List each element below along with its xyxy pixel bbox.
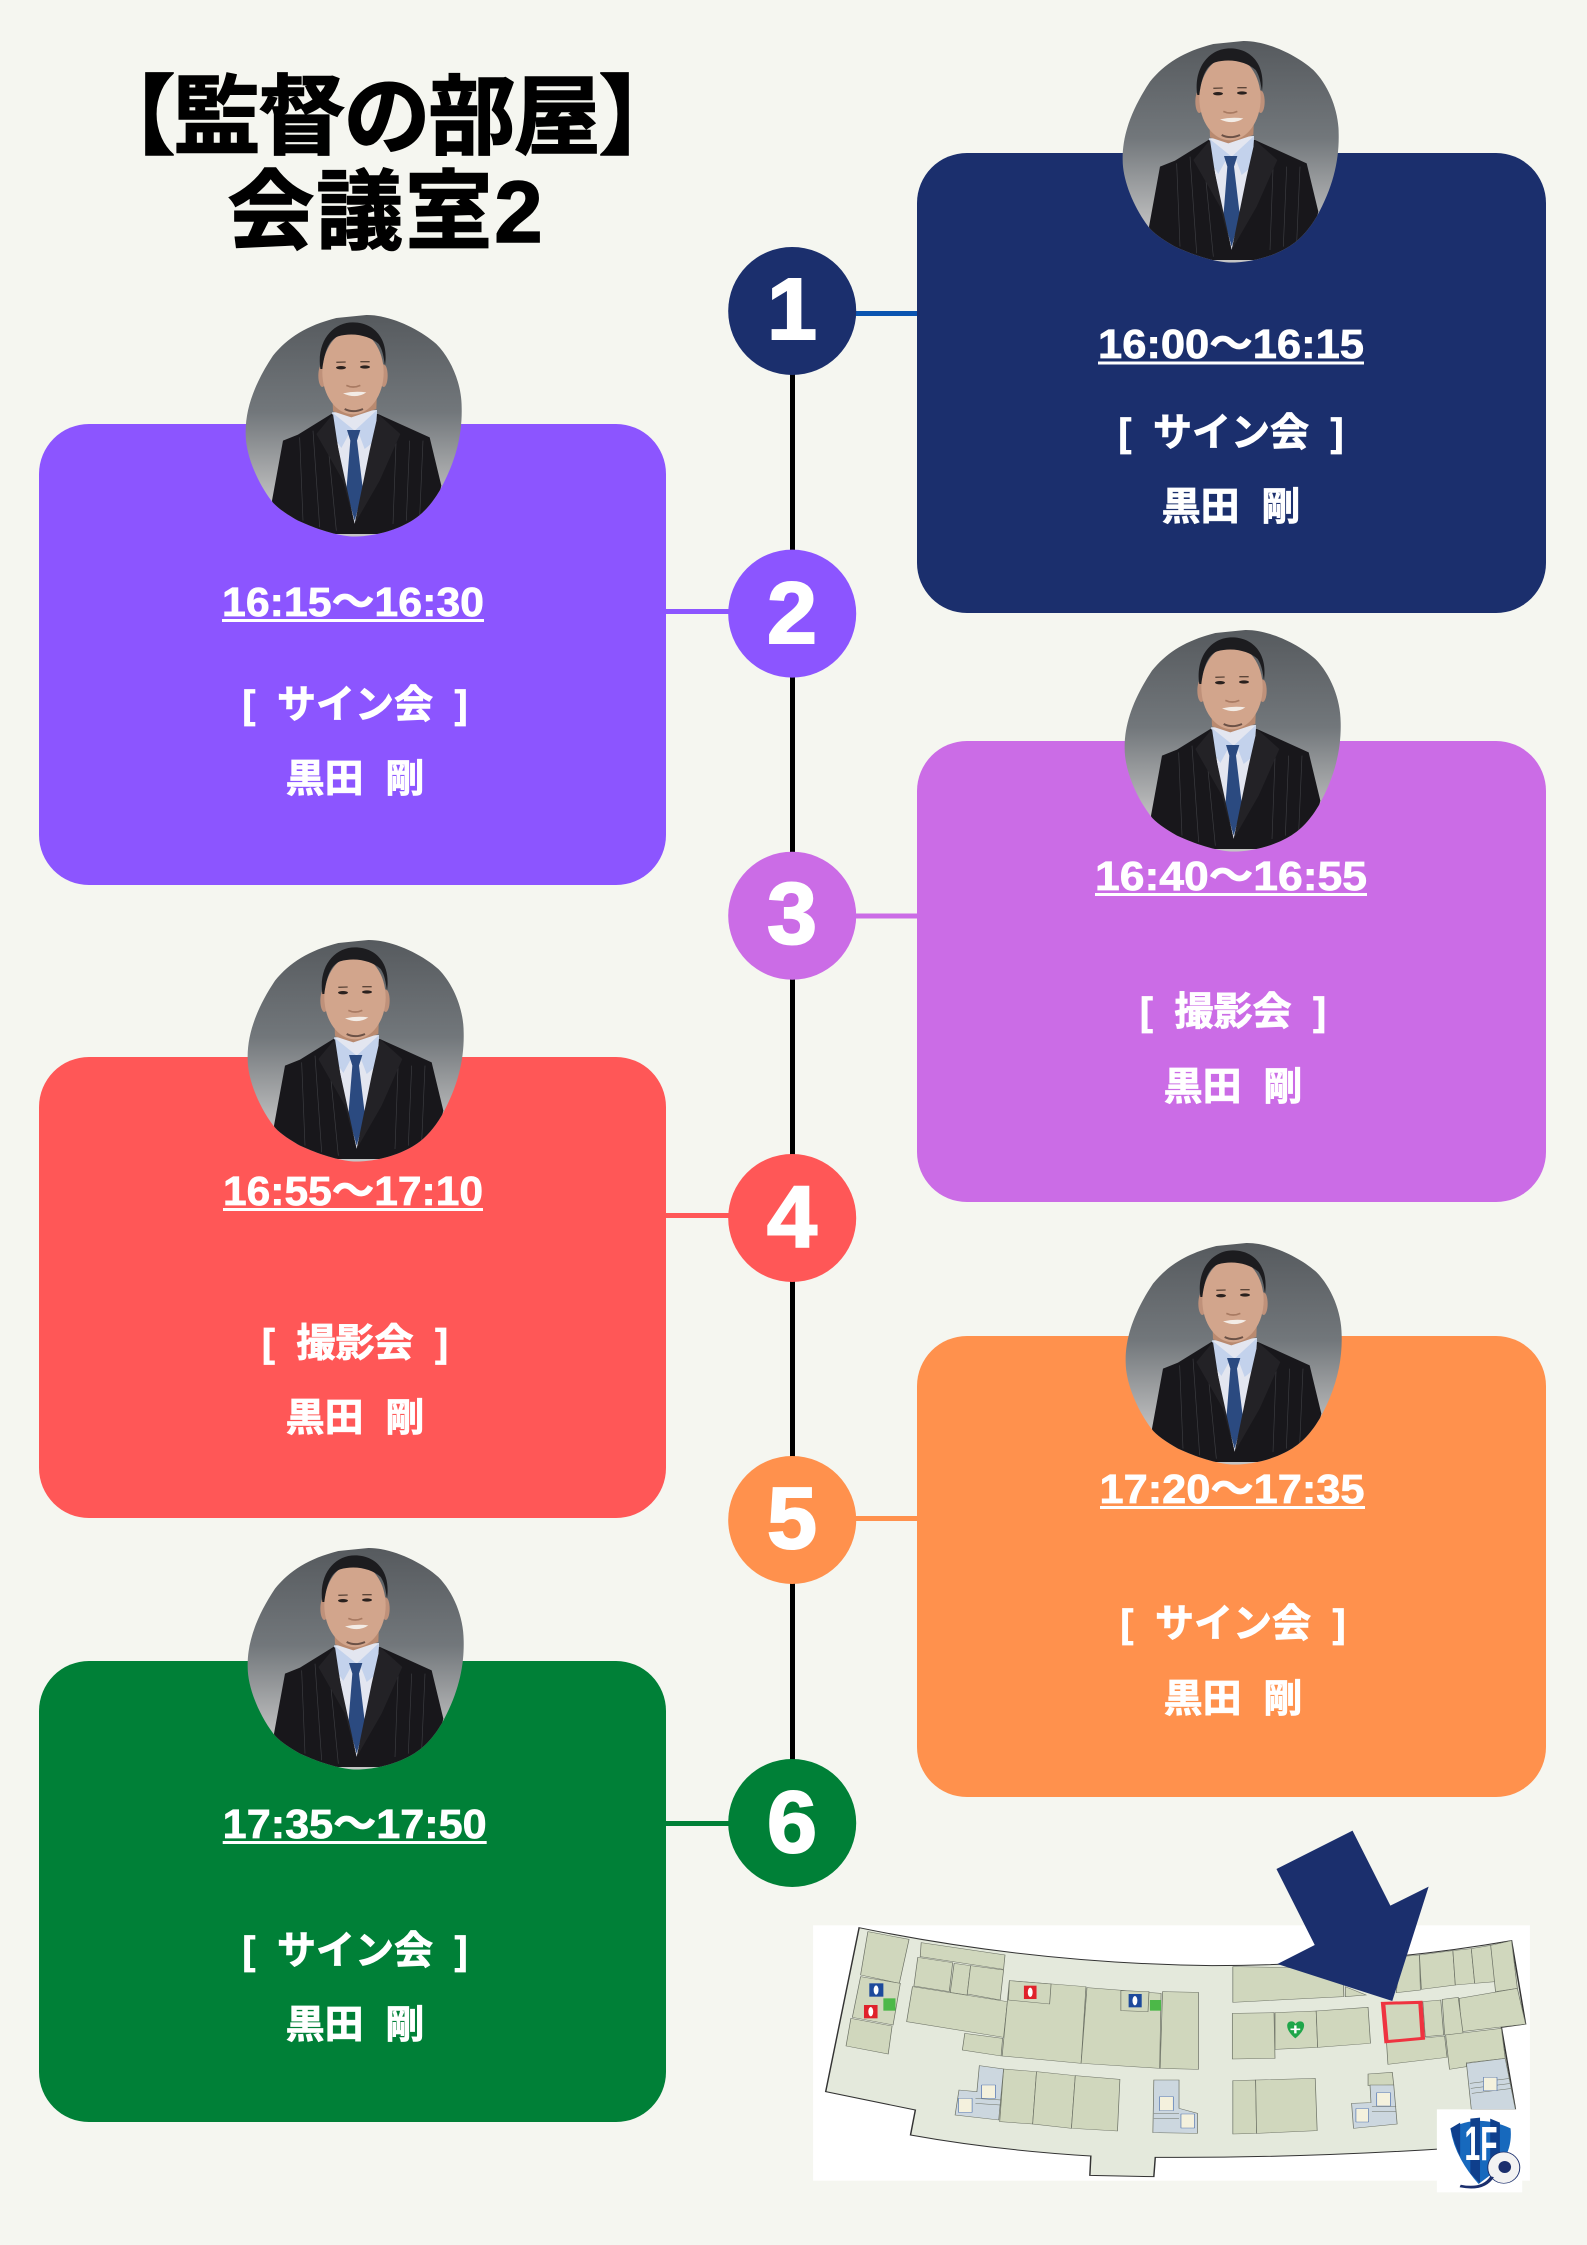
speaker 3: 黒田 剛	[1164, 1066, 1302, 1109]
panel: session 2	[39, 307, 666, 885]
event 3: [ 撮影会 ]	[1140, 991, 1326, 1034]
step marker 4: 4	[767, 1168, 817, 1266]
connector 5	[856, 1516, 918, 1521]
step marker 1: 1	[767, 261, 817, 358]
step marker 3: 3	[767, 866, 817, 962]
time 1: 16:00〜16:15	[1098, 321, 1364, 367]
photo: session 4	[238, 932, 472, 1166]
connector 6	[665, 1821, 729, 1826]
panel: session 5	[917, 1235, 1546, 1797]
time 4: 16:55〜17:10	[223, 1168, 483, 1214]
speaker 2: 黒田 剛	[286, 758, 424, 801]
panel: session 3	[917, 622, 1546, 1202]
photo: session 6	[238, 1540, 472, 1774]
step marker 5	[728, 1456, 856, 1584]
title: 【監督の部屋】	[88, 69, 684, 166]
connector 4	[665, 1213, 729, 1218]
icon: AED heart	[1287, 2021, 1304, 2038]
step marker 4	[728, 1154, 856, 1282]
step marker 3	[728, 852, 856, 980]
event 5: [ サイン会 ]	[1120, 1603, 1346, 1646]
speaker 6: 黒田 剛	[286, 2004, 424, 2047]
floor plan	[826, 1928, 1526, 2177]
event 6: [ サイン会 ]	[242, 1930, 468, 1973]
map icons	[864, 1983, 1497, 2128]
floor map with arrow and logo	[813, 1830, 1530, 2192]
event 1: [ サイン会 ]	[1118, 412, 1344, 455]
connector 3	[856, 914, 918, 918]
photo: session 3	[1115, 622, 1349, 856]
connector 1	[856, 311, 918, 316]
panel: session 1	[917, 33, 1546, 613]
logo	[1437, 2109, 1522, 2192]
speaker 1: 黒田 剛	[1162, 486, 1300, 529]
time 3: 16:40〜16:55	[1095, 853, 1367, 899]
title	[88, 69, 684, 261]
event 4: [ 撮影会 ]	[262, 1322, 448, 1366]
event 2: [ サイン会 ]	[242, 684, 468, 727]
time 5: 17:20〜17:35	[1100, 1466, 1364, 1512]
title: 会議室2	[227, 164, 545, 261]
step marker 6	[728, 1759, 856, 1887]
photo: session 5	[1116, 1235, 1350, 1469]
panel: session 4	[39, 932, 666, 1518]
step marker 2: 2	[767, 565, 817, 662]
time 2: 16:15〜16:30	[222, 579, 484, 625]
photo: session 2	[236, 307, 470, 541]
speaker 5: 黒田 剛	[1164, 1678, 1302, 1721]
arrow	[1276, 1831, 1429, 2001]
map background	[813, 1925, 1530, 2181]
timeline spine	[790, 311, 795, 1823]
panel: session 6	[39, 1540, 666, 2122]
connector 2	[665, 609, 729, 614]
step marker 1	[728, 247, 856, 375]
speaker 4: 黒田 剛	[286, 1397, 424, 1440]
photo: session 1	[1113, 33, 1347, 267]
step marker 6: 6	[767, 1774, 817, 1871]
highlighted room	[1383, 2002, 1423, 2042]
step marker 2	[728, 550, 856, 678]
step marker 5: 5	[767, 1470, 817, 1567]
time 6: 17:35〜17:50	[223, 1801, 487, 1847]
